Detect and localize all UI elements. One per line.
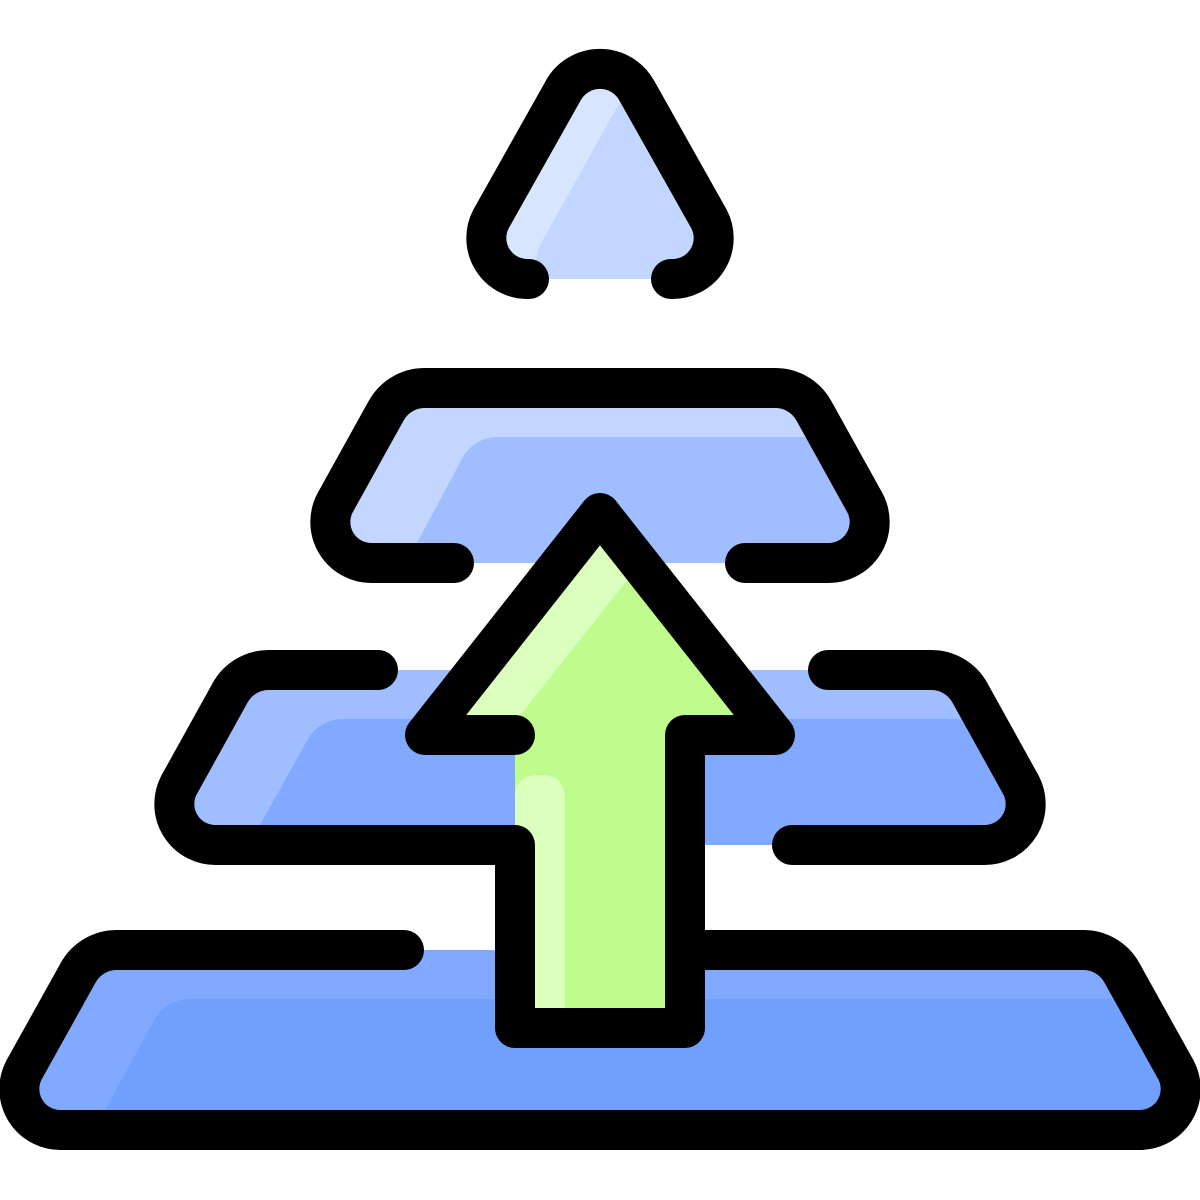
- pyramid tier: second: [330, 388, 870, 563]
- arrow: upward green: [425, 513, 775, 1028]
- pyramid tier: top triangle: [486, 69, 714, 279]
- pyramid tier: base: [19, 950, 1181, 1130]
- pyramid tier: third: [174, 670, 1026, 845]
